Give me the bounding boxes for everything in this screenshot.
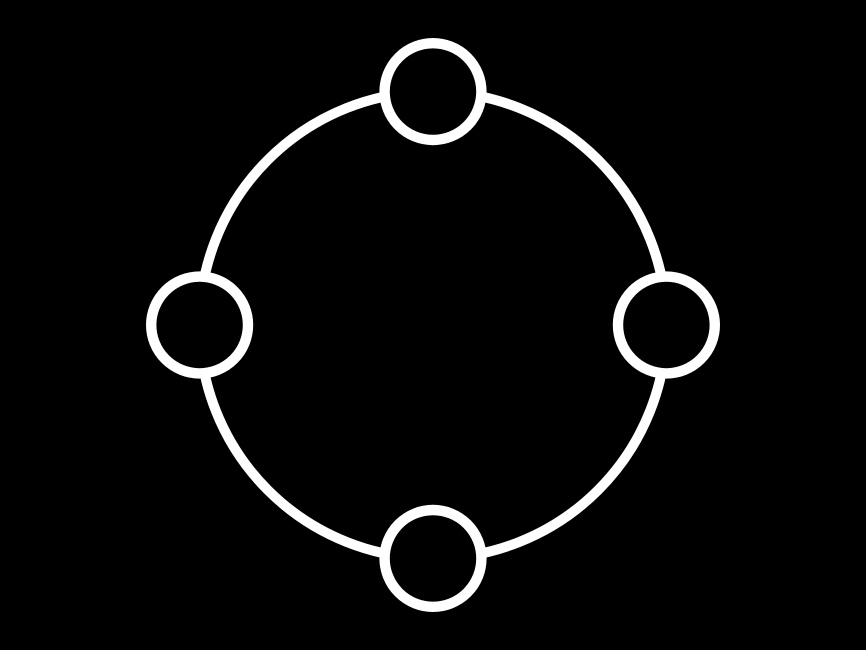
main ring	[200, 92, 666, 558]
node: bottom	[385, 510, 481, 607]
node: right	[618, 277, 715, 373]
node: top	[385, 43, 481, 140]
node: left	[151, 277, 248, 373]
